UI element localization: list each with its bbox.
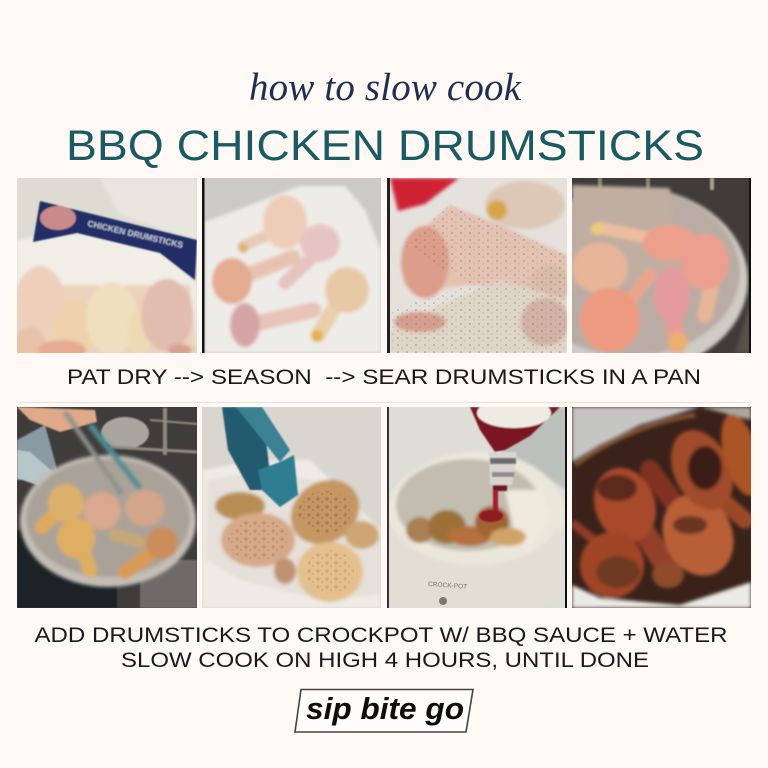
step caption 1: PAT DRY --> SEASON --> SEAR DRUMSTICKS IN A PAN (67, 366, 701, 389)
photo: patting drumsticks dry (202, 178, 381, 353)
script heading: how to slow cook: how to slow cook (249, 66, 522, 109)
faint row divider (17, 402, 751, 403)
photo: BBQ sauce poured into crockpot (387, 398, 567, 608)
title: BBQ chicken drumsticks: BBQ CHICKEN DRUMSTICKS (66, 122, 704, 170)
step caption 2: line one and line two: SLOW COOK ON HIGH 4 HOURS, UNTIL DONE (121, 649, 649, 672)
photo: packaged drumsticks (14, 178, 197, 363)
photo: finished BBQ drumsticks (572, 407, 768, 608)
step caption 2: line one and line two: ADD DRUMSTICKS TO CROCKPOT W/ BBQ SAUCE + WATER (34, 624, 728, 647)
photo: BBQ sauce poured into crockpot: CROCK-POT (428, 581, 467, 591)
photo: drumsticks in crockpot with tongs (202, 407, 381, 608)
photo: seasoning drumsticks (387, 178, 570, 353)
step caption 2: line one and line two (34, 624, 728, 672)
photo: browned drumsticks and tongs (17, 407, 197, 608)
photo: searing drumsticks in pan (572, 178, 751, 353)
logo: sip bite go: sip bite go (306, 691, 464, 726)
photo: packaged drumsticks: CHICKEN DRUMSTICKS (87, 218, 184, 250)
